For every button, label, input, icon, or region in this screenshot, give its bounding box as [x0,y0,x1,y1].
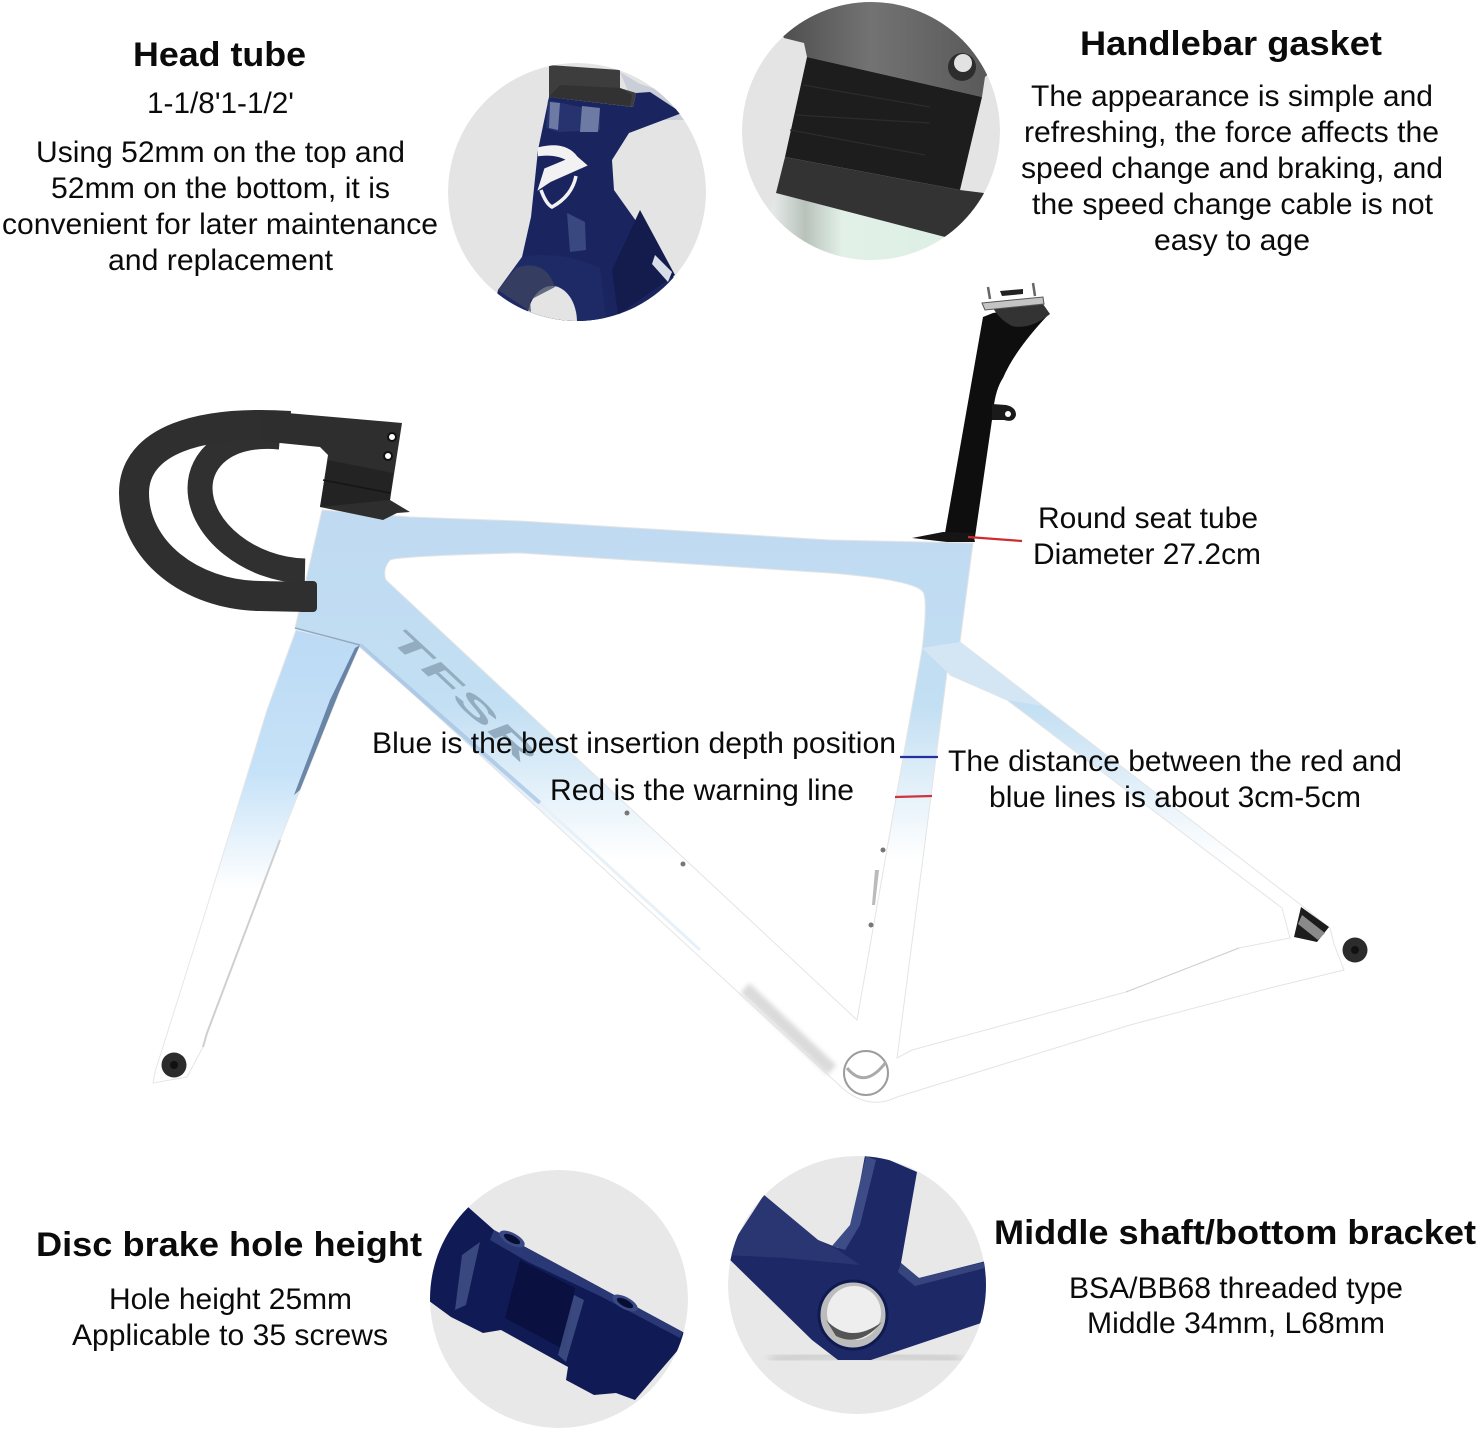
label: TFSR frame logo: TFSR [384,621,543,772]
marker: red warning line [895,796,932,797]
panel: disc brake text [36,1226,422,1352]
callout: insertion depth lines [372,727,896,807]
panel: head tube detail circle [448,63,706,321]
text block: handlebar gasket description: The appearance is simple and [1031,80,1433,113]
fork [153,630,360,1083]
text block: bottom bracket description [1069,1272,1403,1340]
text block: handlebar gasket description [1021,80,1443,257]
text block: head tube description: convenient for later maintenance [2,208,438,241]
illustration: bike frame [134,283,1368,1102]
callout: distance between lines: blue lines is about 3cm-5cm [989,781,1361,814]
callout: insertion depth lines: Red is the warning line [550,774,854,807]
text block: handlebar gasket description: the speed change cable is not [1032,188,1433,221]
icon: bottom bracket shell [819,1281,887,1349]
callout: distance between lines: The distance between the red and [948,745,1402,778]
panel: bottom bracket text [994,1214,1476,1340]
rear dropout [1294,907,1368,962]
callout: insertion depth lines: Blue is the best insertion depth position [372,727,896,760]
icon: frame logo [540,147,584,207]
panel: handlebar gasket text [1021,25,1443,257]
panel: disc brake detail circle [425,1170,690,1428]
bottom bracket [844,1051,888,1095]
stem [260,410,410,520]
marker: red seat tube line [968,537,1022,541]
heading: Handlebar gasket: Handlebar gasket [1080,25,1382,63]
icon: brake mount hole [612,1294,638,1312]
heading: Head tube: Head tube [133,36,306,74]
callout: round seat tube: Round seat tube [1038,502,1258,535]
heading: Middle shaft/bottom bracket: Middle shaft/bottom bracket [994,1214,1476,1252]
icon: brake mount hole [500,1230,525,1248]
marker: blue insertion depth line [900,756,938,758]
text block: head tube description [2,87,438,277]
frame body [295,510,1368,1102]
frame detail dots [624,810,886,928]
text block: head tube description: Using 52mm on the top and [36,136,405,169]
text block: bottom bracket description: BSA/BB68 threaded type [1069,1272,1403,1305]
icon: fork axle bolt [162,1052,186,1078]
text block: handlebar gasket description: refreshing, the force affects the [1024,116,1439,149]
callout: round seat tube [1033,502,1261,571]
text block: disc brake description [72,1283,388,1352]
panel: bottom bracket detail circle [725,1150,990,1414]
panel: head tube text [2,36,438,277]
text block: handlebar gasket description: speed change and braking, and [1021,152,1443,185]
heading: Disc brake hole height: Disc brake hole height [36,1226,422,1264]
panel: handlebar gasket detail circle [742,2,1000,260]
seatpost bottle boss [992,404,1016,421]
text block: head tube description: 52mm on the bottom, it is [51,172,390,205]
text block: head tube description: and replacement [108,244,333,277]
text block: disc brake description: Hole height 25mm [109,1283,352,1316]
text block: head tube description: 1-1/8'1-1/2' [147,87,294,120]
seatpost [912,283,1050,542]
callout: round seat tube: Diameter 27.2cm [1033,538,1261,571]
callout: distance between lines [948,745,1402,814]
icon: gasket bolt [948,53,976,81]
text block: disc brake description: Applicable to 35 screws [72,1319,388,1352]
handlebar [134,425,317,612]
text block: handlebar gasket description: easy to age [1154,224,1310,257]
text block: bottom bracket description: Middle 34mm, L68mm [1087,1307,1385,1340]
